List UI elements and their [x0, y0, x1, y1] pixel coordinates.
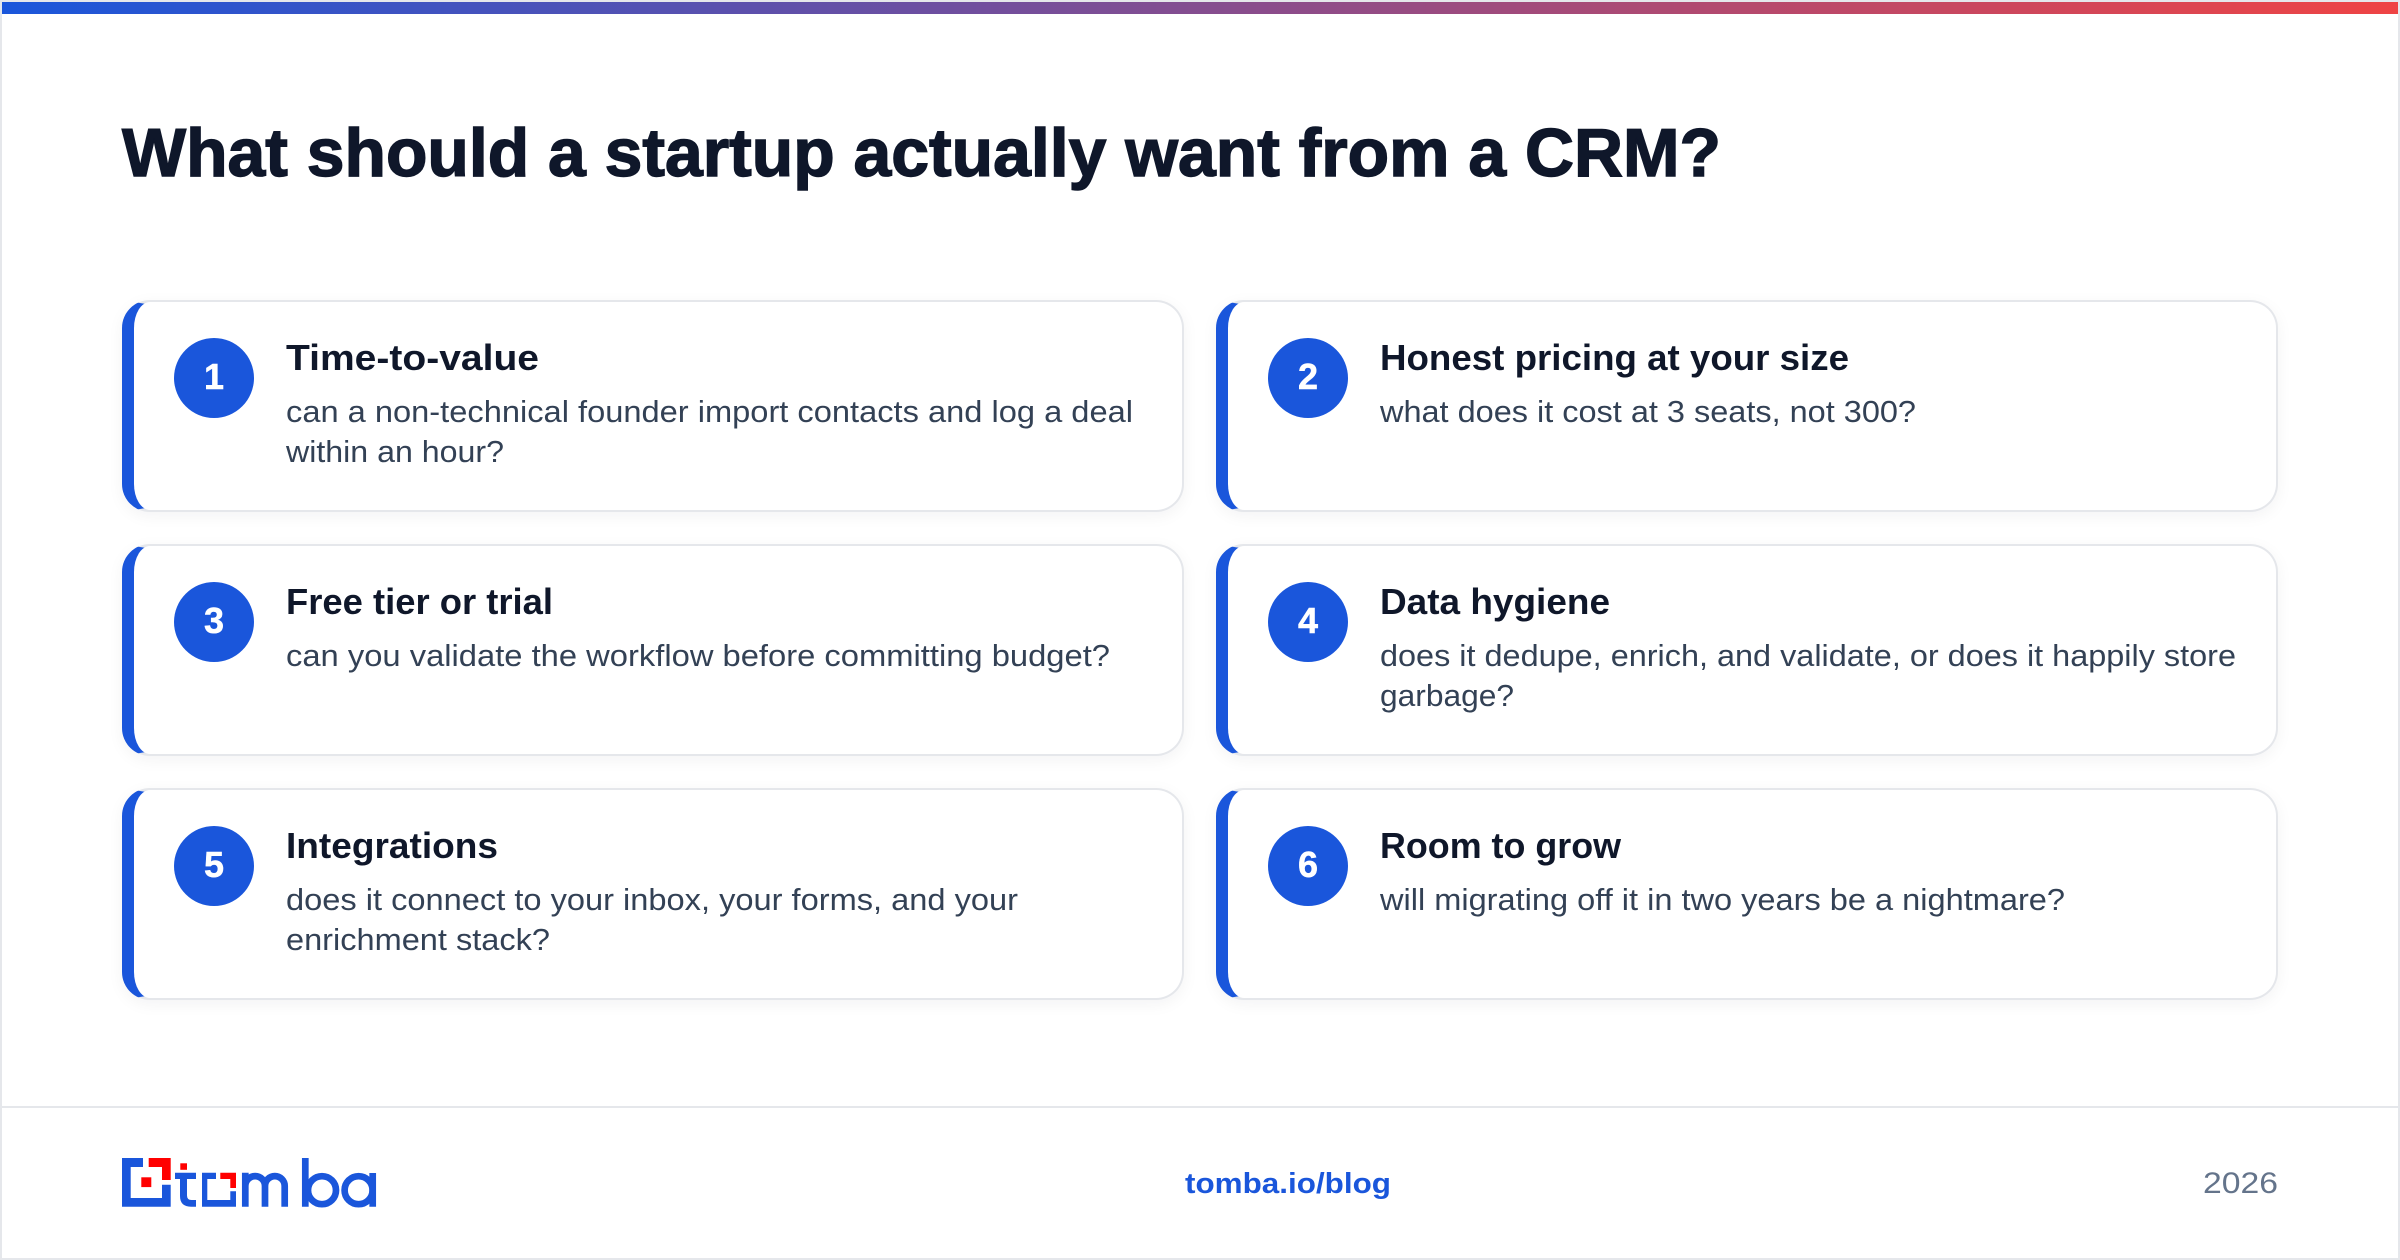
description: what does it cost at 3 seats, not 300?: [1379, 394, 1916, 429]
panel: card 3 free tier: [122, 544, 1184, 756]
card 1 text: [285, 337, 1133, 469]
number badge 2: 2: [1298, 356, 1318, 397]
heading: Time-to-value: [286, 337, 539, 378]
heading: Data hygiene: [1380, 581, 1610, 622]
card 6 text: [1379, 825, 2065, 917]
letter a: [345, 1173, 373, 1207]
description: [1380, 638, 2236, 713]
panel: card 1 time-to-value: [122, 300, 1184, 512]
number badge 4: 4: [1298, 600, 1318, 641]
logo mark red square: [141, 1177, 151, 1187]
description: can a non-technical founder import contacts and log a deal: [286, 394, 1133, 429]
footer link: tomba.io/blog: [1185, 1168, 1391, 1200]
description: does it dedupe, enrich, and validate, or does it happily store: [1380, 638, 2236, 673]
card 5 text: [286, 825, 1018, 957]
card 2 text: [1379, 337, 1916, 429]
heading: Room to grow: [1380, 825, 1622, 866]
number badge 3: 3: [204, 600, 224, 641]
number badge 1: 1: [204, 356, 224, 397]
number badge 3: [174, 582, 254, 662]
description: garbage?: [1380, 678, 1514, 713]
title: What should a startup actually want from a CRM?: [122, 115, 1721, 191]
number badge 6: [1268, 826, 1348, 906]
number badge 2: [1268, 338, 1348, 418]
letter m: [245, 1173, 285, 1207]
number badge 4: [1268, 582, 1348, 662]
heading: Integrations: [286, 825, 498, 866]
panel: card 2 honest pricing: [1216, 300, 2278, 512]
logo mark red corner: [149, 1158, 171, 1180]
panel: card 4 data hygiene: [1216, 544, 2278, 756]
letter t: [175, 1163, 196, 1207]
letter b: [305, 1158, 336, 1207]
logo mark blue bracket: [122, 1158, 171, 1207]
heading: Free tier or trial: [286, 581, 553, 622]
top gradient bar: [2, 2, 2398, 14]
panel: card 5 integrations: [122, 788, 1184, 1000]
description: [285, 394, 1133, 469]
description: within an hour?: [285, 434, 504, 469]
description: [286, 882, 1018, 957]
card 4 text: [1380, 581, 2236, 713]
number badge 6: 6: [1298, 844, 1318, 885]
number badge 5: 5: [204, 844, 224, 885]
panel: card 6 room to grow: [1216, 788, 2278, 1000]
footer year: 2026: [2203, 1167, 2278, 1200]
description: enrichment stack?: [286, 922, 550, 957]
description: can you validate the workflow before committing budget?: [286, 638, 1110, 673]
number badge 1: [174, 338, 254, 418]
card 3 text: [286, 581, 1110, 673]
description: does it connect to your inbox, your forms, and your: [286, 882, 1018, 917]
number badge 5: [174, 826, 254, 906]
heading: Honest pricing at your size: [1380, 337, 1849, 378]
logo: tomba: [122, 1158, 376, 1208]
description: will migrating off it in two years be a nightmare?: [1379, 882, 2065, 917]
letter o square: [202, 1173, 236, 1207]
